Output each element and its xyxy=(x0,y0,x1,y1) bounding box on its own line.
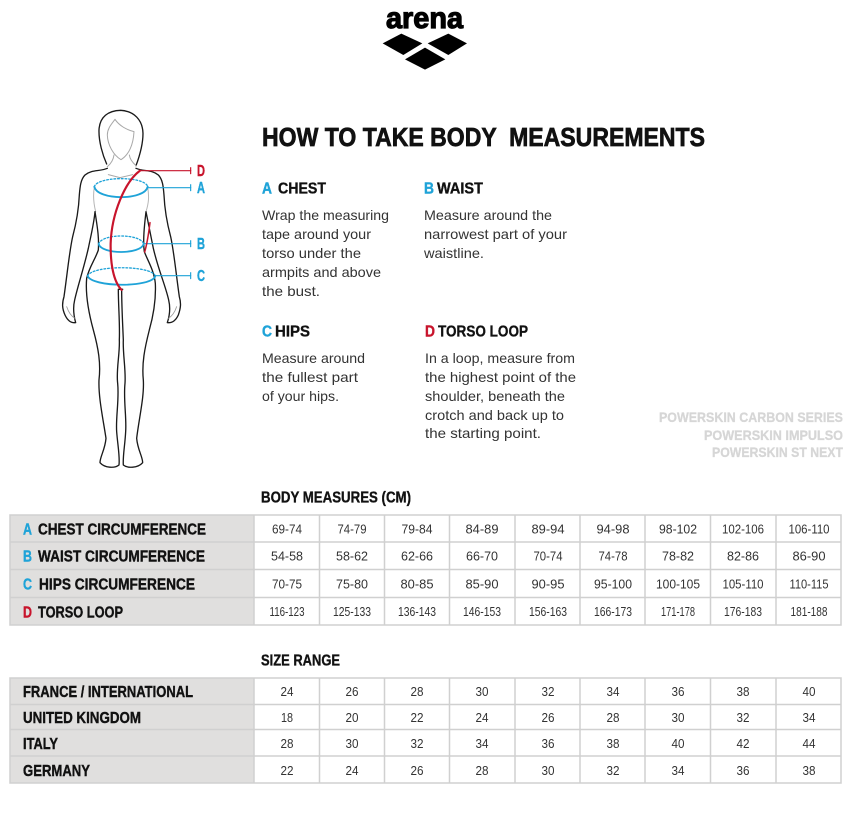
row A: 94-98 xyxy=(596,522,630,536)
figure letter B: B xyxy=(197,236,205,253)
row United Kingdom: 32 xyxy=(736,710,750,725)
section: waist: WAIST xyxy=(437,180,483,198)
section: hips: of your hips. xyxy=(262,388,339,404)
row A: 69-74 xyxy=(272,522,302,536)
row D: TORSO LOOP xyxy=(38,604,123,622)
section: hips xyxy=(262,324,365,404)
body outline left half xyxy=(63,168,123,467)
row United Kingdom: 22 xyxy=(410,710,424,725)
row Germany: 38 xyxy=(802,763,816,778)
section: torso loop: shoulder, beneath the xyxy=(425,388,565,404)
row A: 102-106 xyxy=(722,522,764,536)
row C: HIPS CIRCUMFERENCE xyxy=(39,576,195,594)
row Italy: 40 xyxy=(672,736,684,751)
title: HOW TO TAKE BODY MEASUREMENTS xyxy=(262,122,705,152)
section: torso loop: the highest point of the xyxy=(425,369,576,385)
row D: 156-163 xyxy=(529,604,567,619)
row D: D xyxy=(23,604,32,622)
row C: 95-100 xyxy=(594,576,632,592)
row Germany: 26 xyxy=(410,763,424,778)
row C: 110-115 xyxy=(790,576,828,592)
row Germany: 32 xyxy=(606,763,620,778)
measure C: hips ring xyxy=(88,268,191,285)
row France: 30 xyxy=(476,684,488,699)
row A: 74-79 xyxy=(338,522,366,536)
hair outline xyxy=(99,110,143,166)
section: torso loop: D xyxy=(425,324,435,340)
row A: A xyxy=(23,522,32,538)
row D: 136-143 xyxy=(398,604,436,619)
row Italy: ITALY xyxy=(23,736,58,753)
row France: FRANCE / INTERNATIONAL xyxy=(23,684,193,701)
row C: 105-110 xyxy=(722,576,764,592)
row C: 75-80 xyxy=(336,576,368,592)
row D: 176-183 xyxy=(724,604,762,619)
row D: 181-188 xyxy=(790,604,828,619)
row Italy: 38 xyxy=(606,736,620,751)
row Germany: 28 xyxy=(476,763,488,778)
row D xyxy=(23,604,828,622)
figure letter A: A xyxy=(197,180,205,197)
section: hips: HIPS xyxy=(275,324,310,340)
row France: 34 xyxy=(606,684,620,699)
logo: arena: arena xyxy=(386,2,463,35)
row France: 26 xyxy=(346,684,358,699)
row B: 86-90 xyxy=(792,548,826,564)
row United Kingdom xyxy=(23,710,816,727)
row A: CHEST CIRCUMFERENCE xyxy=(38,522,206,538)
row D: 125-133 xyxy=(333,604,371,619)
section: waist: narrowest part of your xyxy=(424,226,567,242)
row C: 90-95 xyxy=(532,576,564,592)
heading: size range: SIZE RANGE xyxy=(261,652,340,670)
row D: 171-178 xyxy=(661,604,695,619)
section: hips: C xyxy=(262,324,272,340)
row Italy: 42 xyxy=(736,736,750,751)
measure B: waist ring xyxy=(99,236,191,252)
row France: 40 xyxy=(802,684,816,699)
row B: B xyxy=(23,548,32,566)
section: chest: the bust. xyxy=(262,283,320,299)
row Germany: 36 xyxy=(736,763,750,778)
row United Kingdom: UNITED KINGDOM xyxy=(23,710,141,727)
row Italy: 34 xyxy=(476,736,488,751)
section: chest: armpits and above xyxy=(262,264,381,280)
torso inner grey xyxy=(94,187,149,212)
row United Kingdom: 28 xyxy=(606,710,620,725)
row C: 100-105 xyxy=(656,576,700,592)
row B: 82-86 xyxy=(727,548,759,564)
product series list xyxy=(659,409,843,460)
section: waist xyxy=(423,180,567,261)
figure letter D: D xyxy=(197,163,205,180)
row B: 74-78 xyxy=(598,548,628,564)
row France: 36 xyxy=(672,684,684,699)
row France xyxy=(23,684,816,701)
row Germany: 30 xyxy=(542,763,554,778)
row A xyxy=(23,522,830,538)
measure A: chest ring xyxy=(94,179,191,197)
body figure with measurement lines xyxy=(63,110,191,467)
row A: 79-84 xyxy=(402,522,432,536)
row A: 106-110 xyxy=(788,522,830,536)
row A: 84-89 xyxy=(466,522,498,536)
section: waist: waistline. xyxy=(423,245,484,261)
row Italy xyxy=(23,736,816,753)
table: size range xyxy=(10,678,841,783)
row Germany: GERMANY xyxy=(23,763,90,780)
row C: 70-75 xyxy=(272,576,302,592)
section: torso loop xyxy=(425,324,576,441)
row Italy: 44 xyxy=(802,736,816,751)
row Italy: 36 xyxy=(542,736,554,751)
row Germany xyxy=(23,763,816,780)
row D: 116-123 xyxy=(270,604,304,619)
row A: 89-94 xyxy=(532,522,564,536)
row United Kingdom: 34 xyxy=(802,710,816,725)
row France: 38 xyxy=(736,684,750,699)
heading: body measures: BODY MEASURES (CM) xyxy=(261,490,411,506)
row B: WAIST CIRCUMFERENCE xyxy=(38,548,205,566)
row Germany: 24 xyxy=(346,763,358,778)
row B: 70-74 xyxy=(534,548,562,564)
section: chest: A xyxy=(262,180,272,198)
row B xyxy=(23,548,826,566)
body outline right half xyxy=(122,168,181,467)
hand details xyxy=(67,307,177,318)
section: torso loop: crotch and back up to xyxy=(425,407,564,423)
measure D: torso loop xyxy=(111,168,191,290)
row B: 54-58 xyxy=(271,548,303,564)
table: body measures xyxy=(10,515,841,625)
row Germany: 34 xyxy=(672,763,684,778)
row United Kingdom: 20 xyxy=(346,710,358,725)
row Italy: 28 xyxy=(280,736,294,751)
row C: 80-85 xyxy=(400,576,434,592)
row Germany: 22 xyxy=(280,763,294,778)
row B: 66-70 xyxy=(466,548,498,564)
row France: 24 xyxy=(280,684,294,699)
row United Kingdom: 26 xyxy=(542,710,554,725)
row C: C xyxy=(23,576,32,594)
logo: arena xyxy=(383,2,467,70)
section: hips: the fullest part xyxy=(262,369,358,385)
row France: 32 xyxy=(542,684,554,699)
row United Kingdom: 18 xyxy=(281,710,293,725)
section: chest: tape around your xyxy=(262,226,371,242)
section: chest xyxy=(262,180,389,299)
face outline xyxy=(107,119,136,178)
row C: 85-90 xyxy=(466,576,498,592)
section: torso loop: In a loop, measure from xyxy=(425,350,575,366)
row Italy: 30 xyxy=(346,736,358,751)
section: waist: Measure around the xyxy=(424,207,552,223)
row A: 98-102 xyxy=(659,522,697,536)
row B: 78-82 xyxy=(662,548,694,564)
row C xyxy=(23,576,828,594)
section: chest: Wrap the measuring xyxy=(262,207,389,223)
section: torso loop: TORSO LOOP xyxy=(438,324,528,340)
section: chest: CHEST xyxy=(278,180,326,198)
row United Kingdom: 24 xyxy=(476,710,488,725)
row D: 146-153 xyxy=(463,604,501,619)
section: hips: Measure around xyxy=(262,350,365,366)
row D: 166-173 xyxy=(594,604,632,619)
row B: 62-66 xyxy=(401,548,433,564)
row France: 28 xyxy=(410,684,424,699)
row B: 58-62 xyxy=(336,548,368,564)
section: chest: torso under the xyxy=(262,245,361,261)
row United Kingdom: 30 xyxy=(672,710,684,725)
section: torso loop: the starting point. xyxy=(425,425,541,441)
row Italy: 32 xyxy=(410,736,424,751)
figure letter C: C xyxy=(197,268,205,285)
section: waist: B xyxy=(424,180,434,198)
